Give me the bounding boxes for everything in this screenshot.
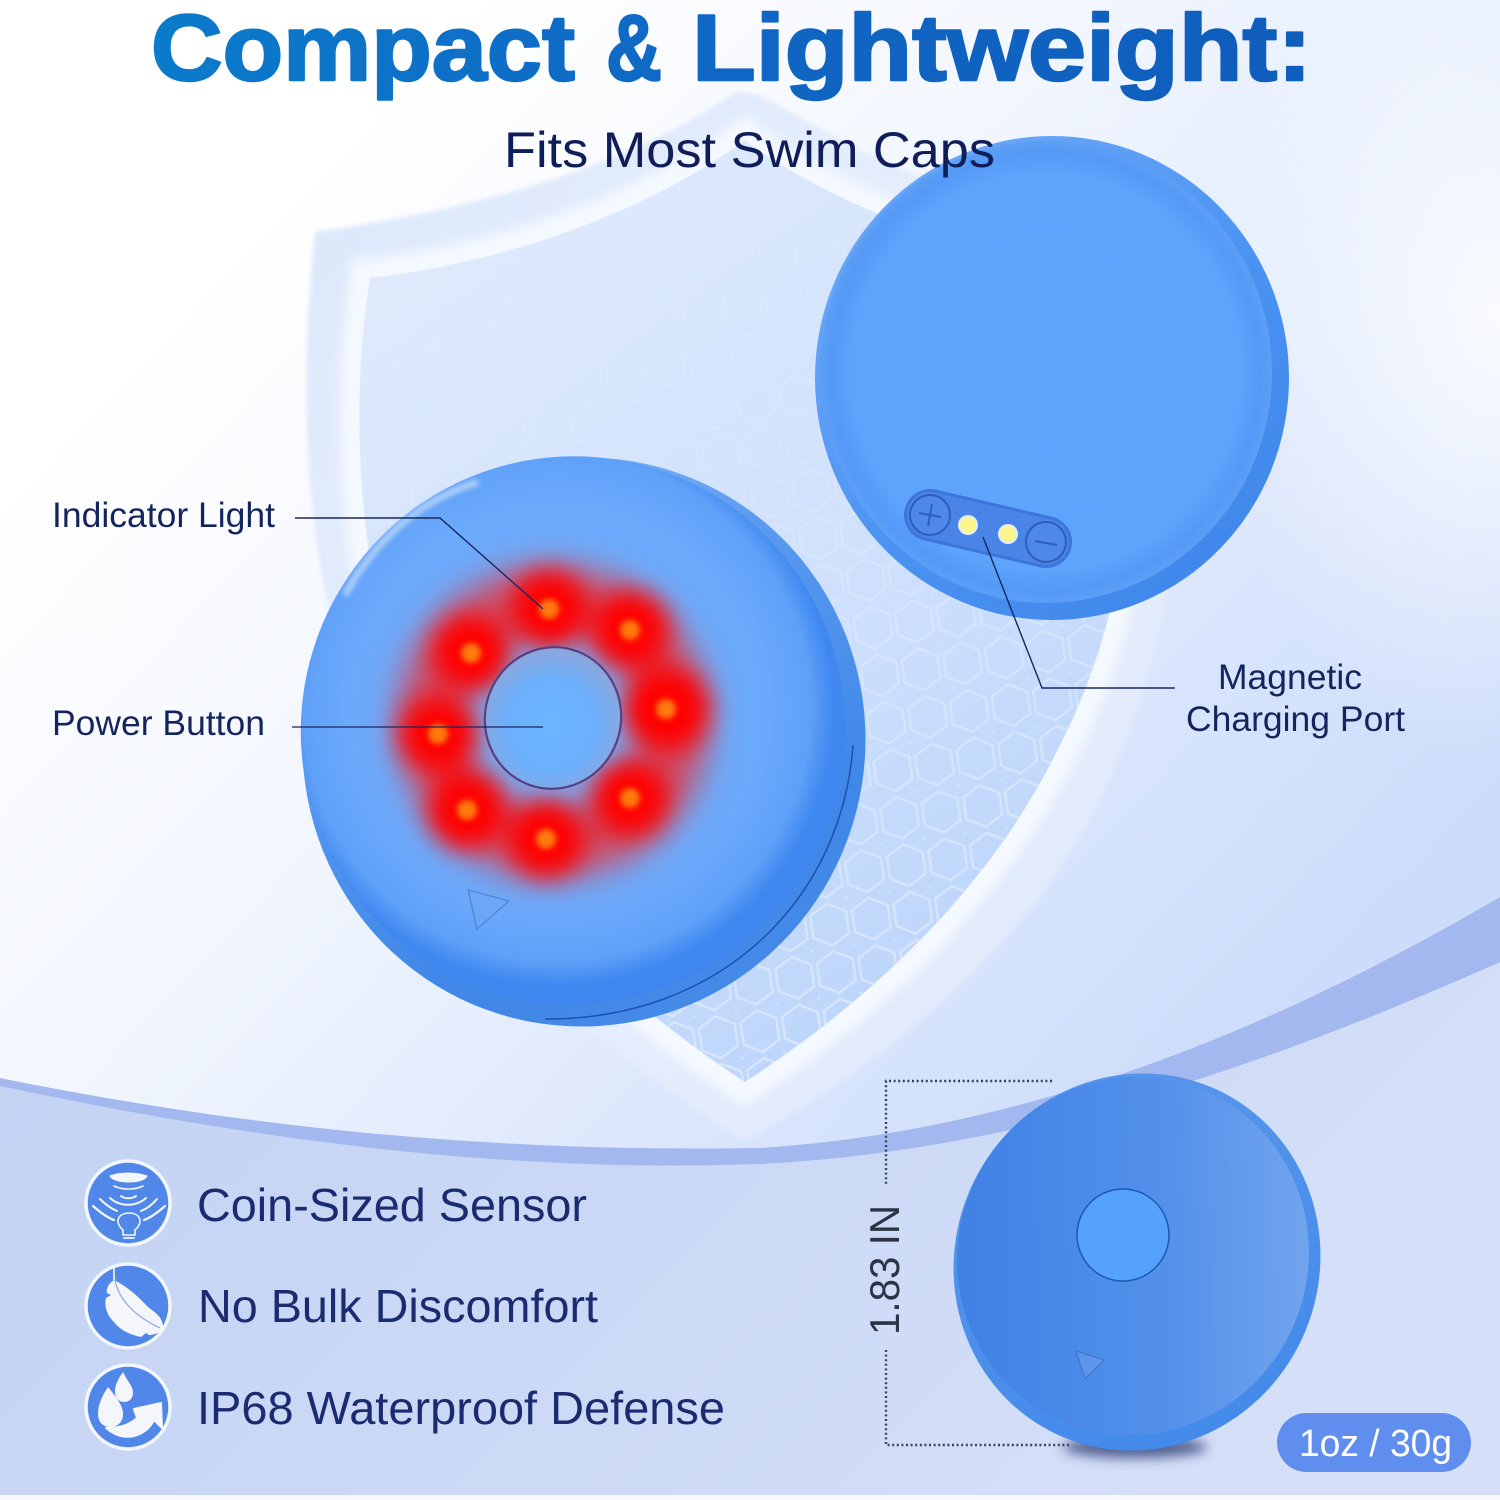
label: power button: Power Button <box>52 704 265 743</box>
label: magnetic charging port: Magnetic <box>1218 658 1362 697</box>
triangle mark <box>468 890 509 929</box>
product: front of sensor with indicator lights <box>222 378 946 1106</box>
shield backdrop <box>306 92 1186 1142</box>
label: indicator light: Indicator Light <box>52 496 275 535</box>
weight badge: 1oz / 30g <box>1299 1423 1452 1465</box>
title <box>151 0 1312 100</box>
feature: coin-sized sensor: Coin-Sized Sensor <box>197 1179 587 1231</box>
weight badge <box>1277 1413 1471 1472</box>
magnetic charging port <box>910 495 1066 562</box>
feature: ip68 waterproof defense: IP68 Waterproof Defense <box>197 1382 725 1434</box>
icon: water drops and arrow <box>86 1365 170 1449</box>
label: magnetic charging port <box>1186 658 1405 739</box>
dimension label: 1.83 IN <box>861 1205 908 1335</box>
connector: charging port <box>983 537 1175 688</box>
swoosh band <box>0 897 1500 1166</box>
power button <box>469 632 637 804</box>
connector: indicator light <box>295 518 543 609</box>
indicator light ring <box>400 571 708 877</box>
subtitle: Fits Most Swim Caps <box>504 122 995 178</box>
size bracket <box>886 1081 1070 1445</box>
connector: power button <box>292 726 543 728</box>
icon: feather <box>86 1264 170 1348</box>
power button <box>1077 1189 1169 1281</box>
lower panel with swoosh <box>0 897 1500 1500</box>
icon: sensor with bulb <box>86 1161 170 1245</box>
triangle mark <box>1076 1351 1104 1379</box>
product: side view of sensor <box>892 1013 1382 1500</box>
product: back of sensor with charging port <box>815 136 1289 620</box>
feature: no bulk discomfort: No Bulk Discomfort <box>198 1280 598 1332</box>
label: magnetic charging port: Charging Port <box>1186 700 1405 739</box>
shield inner panel <box>359 140 1137 1082</box>
